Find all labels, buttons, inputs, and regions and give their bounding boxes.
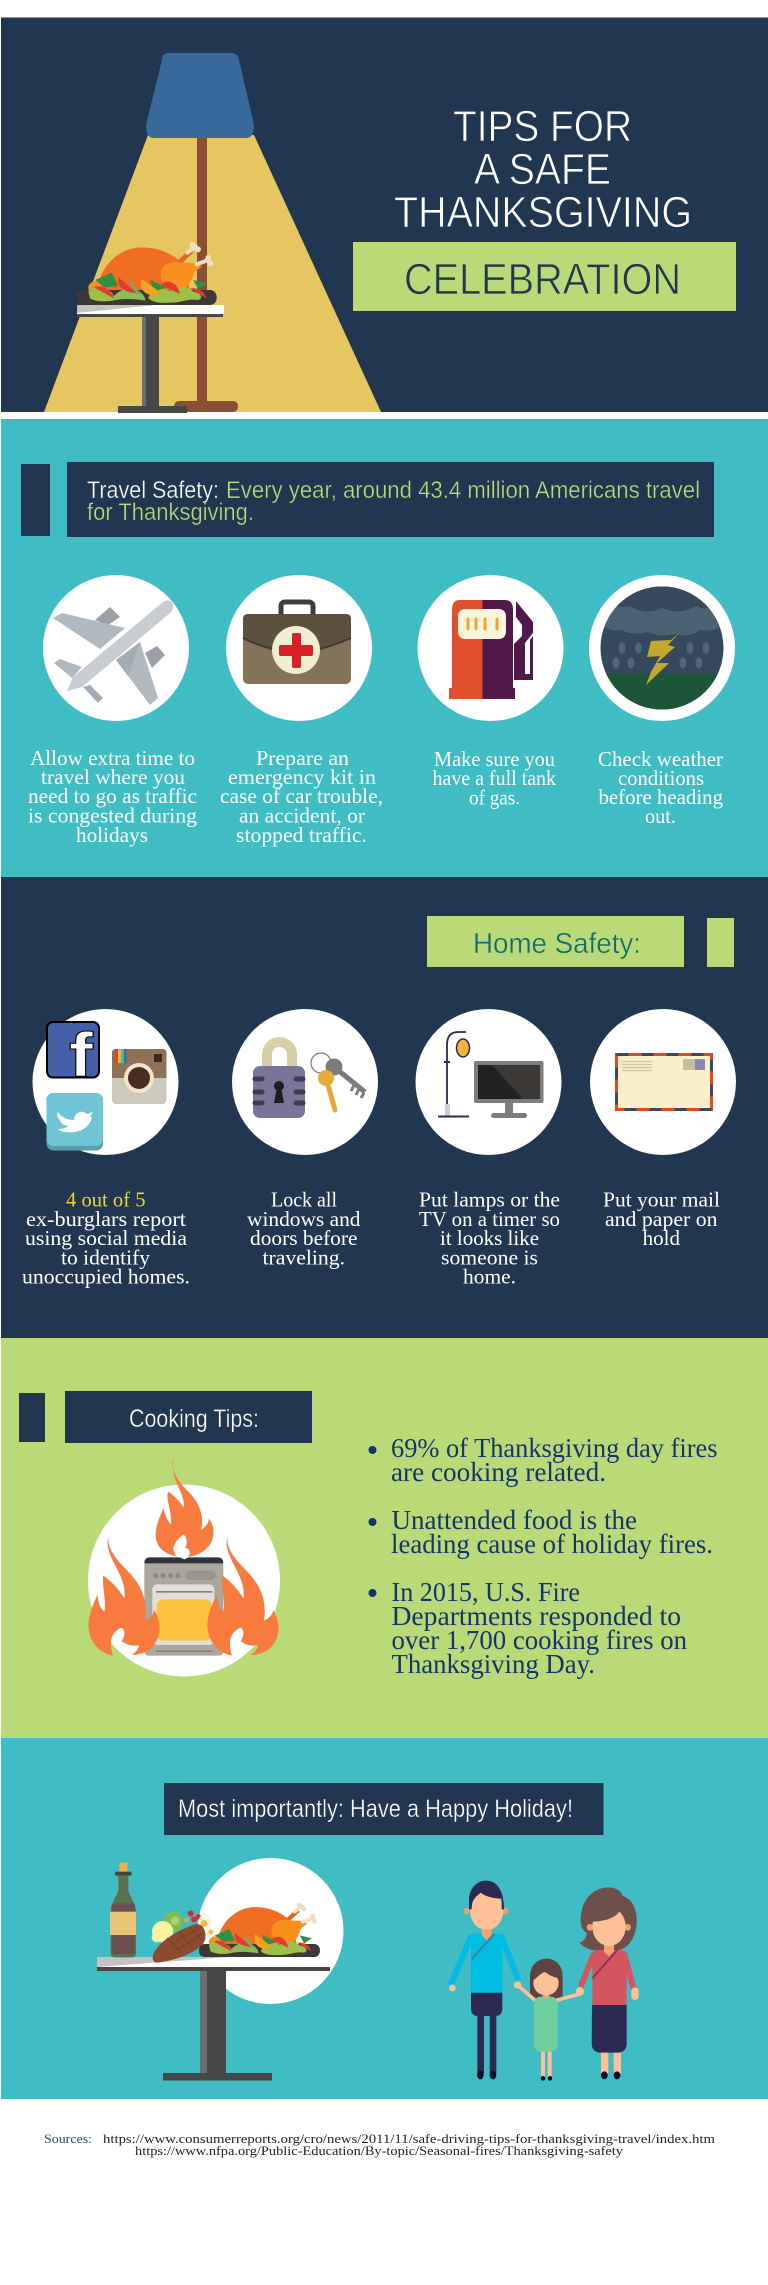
text: check weather: before heading: [598, 785, 723, 809]
facebook: [47, 1021, 99, 1090]
bullet: 69 percent: 69% of Thanksgiving day fires: [391, 1433, 718, 1463]
icon: stove on fire: [88, 1458, 280, 1676]
text: mail on hold: hold: [643, 1226, 680, 1250]
text: emergency kit: [220, 746, 383, 847]
icon: padlock and keys: [232, 1009, 378, 1155]
text: full tank: have a full tank: [432, 766, 556, 790]
sources: https://www.nfpa.org/Public-Education/By-topic/Seasonal-fires/Thanksgiving-safety: [135, 2143, 624, 2158]
twitter: [46, 1093, 103, 1150]
title: THANKSGIVING: [394, 188, 692, 237]
panel: cooking tips: [1, 1338, 768, 1738]
text: social media burglars: ex-burglars report: [26, 1207, 186, 1231]
girl: [517, 1959, 580, 2081]
circle backdrop: [198, 1858, 344, 2004]
text: lock windows: traveling.: [262, 1245, 345, 1269]
text: allow extra time: Allow extra time to: [30, 746, 195, 770]
text: check weather: [598, 747, 723, 828]
text: lamps on timer: Put lamps or the: [419, 1188, 560, 1212]
text: lamps on timer: [419, 1188, 560, 1288]
text: check weather: out.: [645, 804, 676, 828]
text: lamps on timer: home.: [463, 1264, 516, 1288]
man: [449, 1881, 521, 2079]
text: lock windows: windows and: [247, 1207, 361, 1231]
heading marker: [707, 918, 734, 967]
wine bottle: [110, 1863, 136, 1957]
text: mail on hold: Put your mail: [603, 1188, 720, 1212]
table with turkey: [77, 242, 224, 413]
bullet: unattended food: [368, 1505, 713, 1559]
woman: [576, 1887, 639, 2079]
icon: social media: [32, 1009, 178, 1155]
icon: storm: [589, 575, 735, 721]
facebook: f: [69, 1021, 93, 1090]
panel: happy holiday: [1, 1738, 768, 2099]
icon: airplane: [43, 575, 189, 721]
title: TIPS FOR: [453, 102, 632, 151]
illustration: family: [449, 1881, 639, 2081]
text: full tank: Make sure you: [434, 747, 555, 771]
icon: envelope: [590, 1009, 736, 1155]
text: full tank: of gas.: [469, 786, 520, 810]
light beam: [44, 135, 381, 412]
icon: first aid kit: [226, 575, 372, 721]
title banner: celebration: CELEBRATION: [404, 255, 681, 304]
bullet: 69 percent: [368, 1433, 718, 1487]
text: allow extra time: holidays: [76, 823, 148, 847]
text: social media burglars: using social media: [25, 1226, 188, 1250]
text: lock windows: [247, 1188, 361, 1269]
heading: travel safety: for Thanksgiving.: [87, 499, 254, 526]
side dishes: [152, 1910, 215, 1942]
panel: header: [1, 18, 768, 413]
bullet list: cooking facts: [368, 1433, 718, 1679]
text: mail on hold: [603, 1188, 720, 1250]
heading: cooking tips: Cooking Tips:: [129, 1405, 259, 1433]
sources: [44, 2131, 715, 2158]
text: full tank: [432, 747, 556, 810]
text: lamps on timer: it looks like: [440, 1226, 539, 1250]
panel: home safety: [1, 877, 768, 1338]
bullet: unattended food: Unattended food is the: [392, 1505, 637, 1535]
icon: lamp and tv: [416, 1009, 562, 1155]
text: lamps on timer: TV on a timer so: [419, 1207, 560, 1231]
bullet: unattended food: leading cause of holiday fires.: [391, 1529, 713, 1559]
bullet: 1,700 fires: [368, 1577, 687, 1679]
heading: cooking tips: [65, 1391, 312, 1443]
text: check weather: conditions: [618, 766, 704, 790]
text: social media burglars: unoccupied homes.: [22, 1264, 190, 1288]
text: emergency kit: case of car trouble,: [220, 784, 383, 808]
heading: home safety: [427, 916, 684, 967]
text: social media burglars: 4 out of 5: [66, 1188, 146, 1212]
title: [394, 102, 692, 237]
bullet: 1,700 fires: Departments responded to: [392, 1601, 681, 1631]
text: allow extra time: travel where you: [41, 765, 186, 789]
table with feast: [97, 1863, 330, 2080]
text: lock windows: Lock all: [271, 1188, 337, 1212]
heading: happy holiday: [164, 1783, 604, 1835]
floor lamp: [146, 53, 254, 412]
panel: travel safety: [1, 419, 768, 877]
text: lock windows: doors before: [250, 1226, 358, 1250]
text: lamps on timer: someone is: [441, 1245, 538, 1269]
text: check weather: Check weather: [598, 747, 723, 771]
bullet: 1,700 fires: over 1,700 cooking fires on: [392, 1625, 687, 1655]
sources: Sources:: [44, 2131, 92, 2146]
heading: travel safety: Travel Safety:: [87, 477, 219, 504]
sources: https://www.consumerreports.org/cro/news/2011/11/safe-driving-tips-for-thanksgiving-travel/index.htm: [103, 2131, 715, 2146]
turkey platter: [199, 1903, 320, 1957]
heading: travel safety: [67, 462, 714, 537]
text: allow extra time: need to go as traffic: [28, 784, 197, 808]
text: mail on hold: and paper on: [605, 1207, 718, 1231]
text: emergency kit: Prepare an: [256, 746, 350, 770]
heading: happy holiday: Most importantly: Have a Happy Holiday!: [178, 1795, 573, 1823]
heading: home safety: Home Safety:: [473, 928, 641, 960]
heading: travel safety: Every year, around 43.4 million Americans travel: [226, 477, 700, 504]
heading marker: [21, 464, 50, 536]
text: emergency kit: stopped traffic.: [236, 823, 367, 847]
title: A SAFE: [474, 145, 611, 194]
text: allow extra time: is congested during: [28, 804, 198, 828]
text: social media burglars: to identify: [61, 1245, 151, 1269]
roast: [153, 1924, 205, 1963]
heading marker: [19, 1393, 45, 1442]
bullet: 69 percent: are cooking related.: [391, 1457, 606, 1487]
text: emergency kit: an accident, or: [239, 804, 365, 828]
bullet: 1,700 fires: In 2015, U.S. Fire: [392, 1577, 580, 1607]
text: social media burglars: [22, 1188, 190, 1288]
icon: gas pump: [418, 575, 564, 721]
bullet: 1,700 fires: Thanksgiving Day.: [392, 1649, 595, 1679]
title banner: celebration: [353, 242, 736, 311]
text: allow extra time: [28, 746, 198, 847]
text: emergency kit: emergency kit in: [228, 765, 377, 789]
instagram: [112, 1049, 166, 1104]
